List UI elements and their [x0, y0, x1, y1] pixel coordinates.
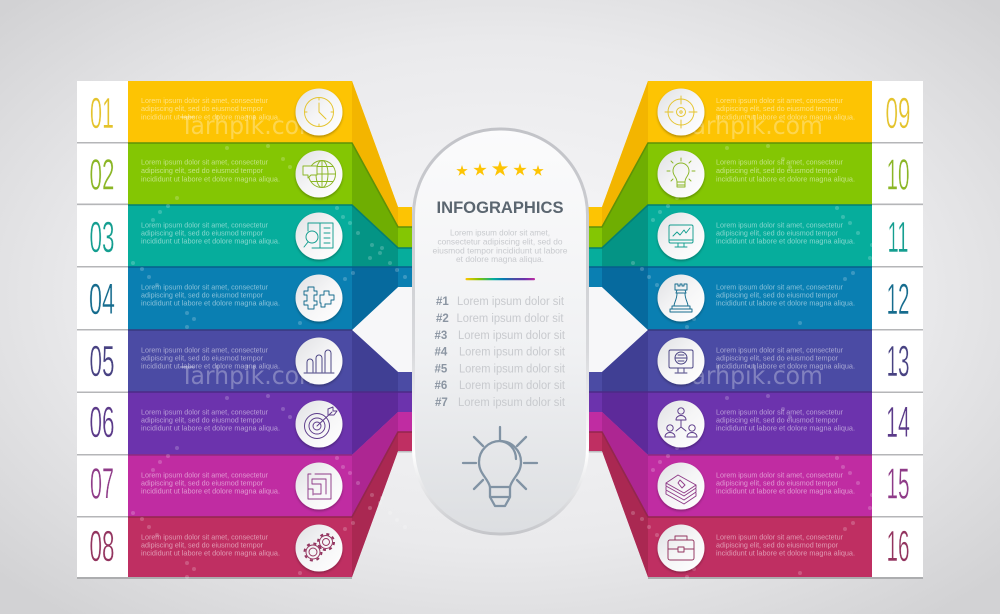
panel: 10	[588, 143, 923, 248]
panel: 16	[588, 432, 923, 579]
panel: 01: Lorem ipsum dolor sit amet, consectetur	[141, 96, 269, 105]
panel: 12: Lorem ipsum dolor sit amet, consectetur	[716, 282, 844, 292]
panel: 09	[588, 81, 923, 227]
panel: 12	[588, 267, 923, 330]
panel: 16: incididunt ut labore et dolore magna aliqua.	[716, 548, 855, 558]
numbered list: Lorem ipsum dolor sit	[457, 296, 565, 308]
panel: 15: 15	[886, 460, 910, 508]
panel: 04: 04	[89, 275, 115, 324]
panel: 02	[77, 143, 412, 248]
panel: 05: adipiscing elit, sed do eiusmod tempor	[141, 354, 264, 362]
icon: chess rook	[658, 274, 704, 322]
panel: 11: incididunt ut labore et dolore magna aliqua.	[716, 236, 855, 246]
numbered list: #7	[435, 397, 448, 409]
icon: light bulb	[658, 150, 704, 198]
panel: 08: 08	[90, 522, 114, 571]
panel: 07: adipiscing elit, sed do eiusmod tempor	[141, 478, 264, 488]
watermark text: Tarhpik.com	[179, 111, 322, 140]
panel: 15: adipiscing elit, sed do eiusmod tempor	[716, 478, 839, 488]
panel: 16: 16	[886, 522, 910, 571]
panel: 01: 01	[90, 89, 114, 138]
panel: 08	[77, 432, 412, 579]
icon: puzzle pieces	[296, 274, 342, 322]
panel: 10: 10	[886, 150, 910, 200]
panel: 08: Lorem ipsum dolor sit amet, consectetur	[141, 532, 269, 542]
panel: 06: Lorem ipsum dolor sit amet, consectetur	[141, 408, 269, 416]
panel: 06: 06	[90, 398, 114, 447]
panel: 09: Lorem ipsum dolor sit amet, consectetur	[716, 96, 844, 105]
panel: 07: 07	[90, 460, 114, 508]
panel: 03: incididunt ut labore et dolore magna aliqua.	[141, 236, 280, 246]
rainbow divider	[466, 278, 535, 280]
watermark text: Tarhpik.com	[680, 111, 823, 140]
panel: 02: 02	[90, 150, 114, 200]
panel: 03: 03	[90, 213, 114, 262]
watermark text	[179, 111, 823, 390]
watermark text: Tarhpik.com	[680, 361, 823, 390]
panel: 13: adipiscing elit, sed do eiusmod tempor	[716, 354, 839, 362]
intro text: eiusmod tempor incididunt ut labore	[432, 246, 568, 256]
icon: money stack	[658, 462, 704, 510]
panel: 11: adipiscing elit, sed do eiusmod tempor	[716, 228, 839, 238]
panel: 04: Lorem ipsum dolor sit amet, consectetur	[141, 282, 269, 292]
panel: 16: adipiscing elit, sed do eiusmod tempor	[716, 540, 839, 550]
numbered list: Lorem ipsum dolor sit	[458, 330, 566, 342]
panel: 02: Lorem ipsum dolor sit amet, consectetur	[141, 158, 269, 166]
intro text: Lorem ipsum dolor sit amet,	[450, 228, 550, 238]
numbered list: #3	[434, 330, 447, 342]
panel: 03: adipiscing elit, sed do eiusmod tempor	[141, 228, 264, 238]
panel: 02: incididunt ut labore et dolore magna aliqua.	[141, 174, 280, 184]
panel: 15	[588, 412, 923, 518]
panel: 05	[77, 330, 412, 393]
panel: 13: 13	[886, 337, 910, 386]
panel: 13: incididunt ut labore et dolore magna aliqua.	[716, 362, 855, 370]
panel: 15: incididunt ut labore et dolore magna aliqua.	[716, 486, 855, 496]
panel: 04: incididunt ut labore et dolore magna aliqua.	[141, 298, 280, 308]
title: INFOGRAPHICS	[436, 198, 564, 217]
dotted watermark pattern	[131, 144, 907, 579]
panel: 05: Lorem ipsum dolor sit amet, consectetur	[141, 346, 269, 354]
intro text: consectetur adipiscing elit, sed do	[438, 236, 563, 246]
icon: maze	[296, 462, 342, 510]
icon: team structure	[658, 400, 704, 448]
panel: 09: adipiscing elit, sed do eiusmod tempor	[716, 104, 839, 113]
numbered list: Lorem ipsum dolor sit	[459, 346, 566, 358]
panel: 06: incididunt ut labore et dolore magna aliqua.	[141, 424, 280, 432]
numbered list: Lorem ipsum dolor sit	[459, 380, 566, 392]
panel: 08: adipiscing elit, sed do eiusmod tempor	[141, 540, 264, 550]
panel: 03	[77, 205, 412, 268]
panel: central capsule	[414, 129, 588, 534]
panel: 14: incididunt ut labore et dolore magna aliqua.	[716, 424, 855, 432]
panel: 05: incididunt ut labore et dolore magna aliqua.	[141, 362, 280, 370]
panel: 09: 09	[886, 89, 910, 138]
numbered list: Lorem ipsum dolor sit	[456, 313, 564, 325]
icon: large light bulb	[463, 427, 537, 506]
icon: briefcase	[658, 524, 704, 572]
panel: 06	[77, 392, 412, 456]
panel: 07	[77, 412, 412, 518]
icon: clock	[296, 88, 342, 136]
panel: 16: Lorem ipsum dolor sit amet, consectetur	[716, 532, 844, 542]
panel: 13	[588, 330, 923, 393]
panel: 10: adipiscing elit, sed do eiusmod tempor	[716, 166, 839, 175]
numbered list: #1	[436, 296, 449, 308]
panel: 01	[77, 81, 412, 227]
panel: 11: 11	[888, 213, 908, 262]
icon: bar arches	[296, 338, 342, 384]
panel: 14: 14	[886, 398, 910, 447]
panel: 06: adipiscing elit, sed do eiusmod tempor	[141, 416, 264, 424]
panel: 04: adipiscing elit, sed do eiusmod tempor	[141, 290, 264, 300]
panel: 09: incididunt ut labore et dolore magna aliqua.	[716, 112, 855, 122]
gap between connectors	[352, 287, 648, 372]
numbered list	[434, 296, 566, 409]
panel: 12: 12	[886, 275, 910, 324]
panel: 14	[588, 392, 923, 456]
intro text	[432, 228, 568, 264]
panel: 07: incididunt ut labore et dolore magna aliqua.	[141, 486, 280, 496]
panel: 10: Lorem ipsum dolor sit amet, consectetur	[716, 158, 844, 166]
panel: 01: adipiscing elit, sed do eiusmod tempor	[141, 104, 264, 113]
icon: open book with magnifier	[296, 212, 342, 260]
icon: crosshair	[658, 88, 704, 136]
panel: 05: 05	[90, 337, 114, 386]
icon: target with arrow	[296, 400, 342, 448]
panel: 07: Lorem ipsum dolor sit amet, consectetur	[141, 470, 269, 480]
icon: rating stars	[456, 160, 544, 176]
panel: 14: Lorem ipsum dolor sit amet, consectetur	[716, 408, 844, 416]
icon: gears	[296, 524, 342, 572]
panel: 12: adipiscing elit, sed do eiusmod tempor	[716, 290, 839, 300]
numbered list: Lorem ipsum dolor sit	[458, 397, 566, 409]
panel: 13: Lorem ipsum dolor sit amet, consectetur	[716, 346, 844, 354]
panel: 08: incididunt ut labore et dolore magna aliqua.	[141, 548, 280, 558]
numbered list: #6	[434, 380, 447, 392]
icon: monitor with chart	[658, 212, 704, 260]
numbered list: #5	[434, 364, 448, 376]
icon: globe with speech bubble	[296, 150, 342, 198]
panel: 14: adipiscing elit, sed do eiusmod tempor	[716, 416, 839, 424]
numbered list: Lorem ipsum dolor sit	[459, 364, 566, 376]
numbered list: #4	[434, 346, 448, 358]
panel: 02: adipiscing elit, sed do eiusmod tempor	[141, 166, 264, 175]
numbered list: #2	[436, 313, 449, 325]
panel: 12: incididunt ut labore et dolore magna aliqua.	[716, 298, 855, 308]
watermark text: Tarhpik.com	[179, 361, 322, 390]
panel: 10: incididunt ut labore et dolore magna aliqua.	[716, 174, 855, 184]
panel: 15: Lorem ipsum dolor sit amet, consectetur	[716, 470, 844, 480]
intro text: et dolore magna aliqua.	[456, 254, 544, 264]
panel: 01: incididunt ut labore et dolore magna aliqua.	[141, 112, 280, 122]
panel: 04	[77, 267, 412, 330]
panel: 11	[588, 205, 923, 268]
panel: 03: Lorem ipsum dolor sit amet, consectetur	[141, 220, 269, 230]
panel: 11: Lorem ipsum dolor sit amet, consectetur	[716, 220, 844, 230]
icon: monitor with user	[658, 338, 704, 384]
